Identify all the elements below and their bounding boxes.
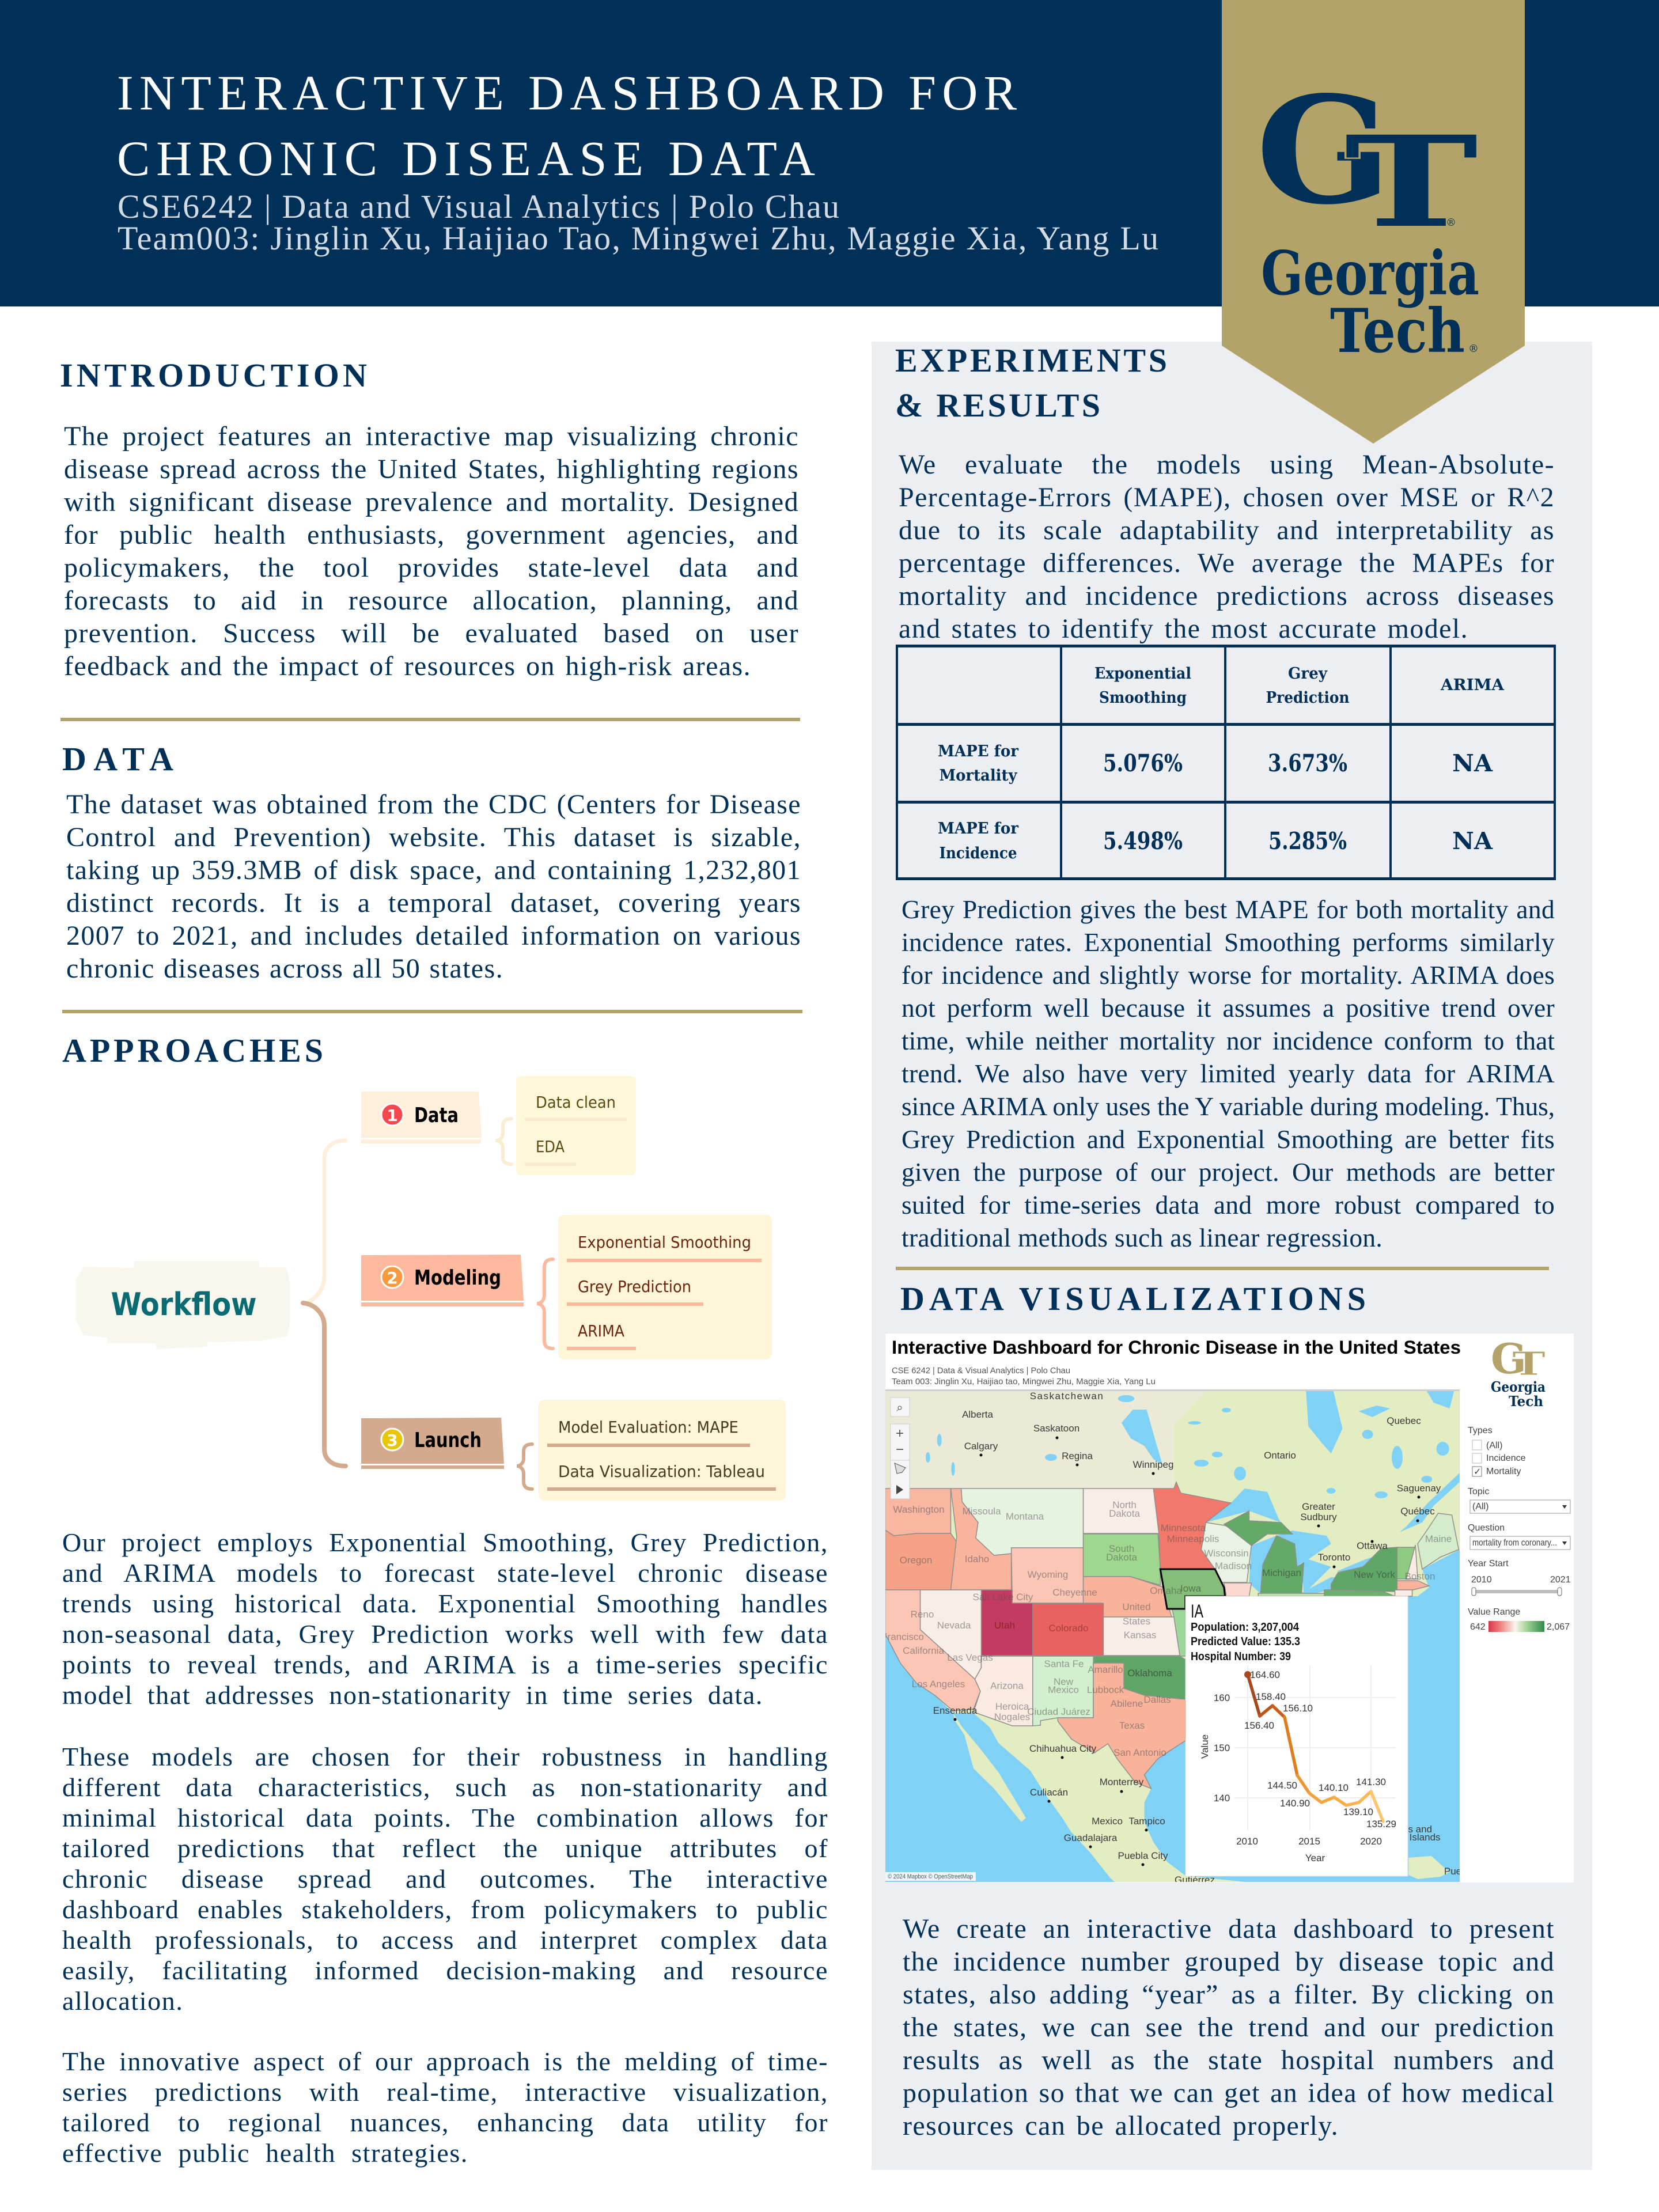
node: data: [361, 1092, 482, 1143]
map labels: Pue: [1444, 1866, 1461, 1877]
text: results discussion: incidence rates. Exponential Smoothing performs similarly: [902, 927, 1555, 957]
text: why these models: dashboard enables stakeholders, from policymakers to public: [62, 1895, 828, 1924]
lakes: [926, 1391, 1460, 1596]
course and team subtitle: [118, 188, 1158, 257]
map: Arizona: [990, 1680, 1024, 1691]
map: Idaho: [965, 1554, 989, 1565]
map labels: Toronto: [1318, 1552, 1350, 1563]
line chart: value by year: 2020: [1360, 1836, 1382, 1847]
tooltip text: Population: 3,207,004: [1191, 1621, 1300, 1634]
title: CHRONIC DISEASE DATA: [117, 131, 815, 186]
table header labels: Mortality: [939, 767, 1018, 785]
text: results discussion: time, while neither mortality nor incidence conform to that: [902, 1026, 1555, 1055]
sub-list: data steps: [516, 1076, 636, 1175]
map: Maine: [1425, 1533, 1452, 1544]
node: launch: Launch: [414, 1429, 482, 1452]
sidebar filters: 642: [1470, 1622, 1486, 1632]
map labels: Puebla City: [1118, 1850, 1168, 1861]
title: [117, 65, 1017, 186]
text: innovation: tailored to regional nuances, enhancing data utility for: [62, 2108, 828, 2137]
map: New: [1054, 1676, 1074, 1687]
sidebar filters: 2021: [1550, 1575, 1571, 1585]
map controls: −: [896, 1442, 904, 1457]
line chart: value by year: Year: [1305, 1853, 1325, 1863]
line chart: value by year: 141.30: [1356, 1777, 1386, 1787]
map: Utah: [994, 1620, 1015, 1631]
text: dashboard description: population so that we can get an idea of how medical: [903, 2078, 1555, 2108]
text: evaluation method: Percentage-Errors (MAPE), chosen over MSE or R^2: [899, 482, 1555, 513]
map: North: [1112, 1499, 1137, 1510]
table values: 5.498%: [1103, 827, 1183, 855]
workflow mind map: [75, 1076, 786, 1501]
text: results discussion: not perform well because it assumes a positive trend over: [902, 993, 1555, 1022]
text: why these models: tailored predictions that reflect the unique attributes of: [62, 1834, 828, 1863]
text: introduction: feedback and the impact of resources on high-risk areas.: [64, 651, 751, 681]
text: evaluation method: percentage differences. We average the MAPEs for: [899, 548, 1555, 578]
text: results discussion: since ARIMA only uses the Y variable during modeling. Thus,: [902, 1092, 1555, 1121]
small Georgia Tech logo: Georgia: [1491, 1378, 1546, 1395]
heading: experiments and results: EXPERIMENTS: [895, 342, 1167, 379]
table values: 5.285%: [1268, 827, 1347, 855]
heading: introduction: INTRODUCTION: [60, 357, 367, 394]
line chart: value by year: 160: [1214, 1692, 1230, 1703]
map: Oregon: [900, 1555, 932, 1566]
map labels: Culiacán: [1030, 1787, 1068, 1798]
heading: experiments and results: & RESULTS: [895, 387, 1100, 424]
logo: GT monogram: T: [1344, 109, 1478, 256]
text: why these models: minimal historical data points. The combination allows for: [62, 1803, 828, 1832]
logo: Georgia Tech wordmark: Georgia: [1261, 237, 1479, 309]
text: evaluation method: mortality and incidence predictions across diseases: [899, 581, 1555, 611]
land base: [885, 1389, 1460, 1882]
heading: approaches: APPROACHES: [62, 1032, 323, 1069]
map: Los Angeles: [912, 1679, 965, 1690]
text: results discussion: [902, 895, 1555, 1252]
sub-list: models: Exponential Smoothing: [578, 1233, 751, 1252]
map controls: +: [896, 1426, 904, 1441]
map: New York: [1354, 1569, 1395, 1580]
sub-list: data steps: EDA: [536, 1137, 565, 1156]
logo: GT monogram: G: [1256, 65, 1392, 237]
dashboard title: Team 003: Jinglin Xu, Haijiao tao, Mingwei Zhu, Maggie Xia, Yang Lu: [892, 1377, 1156, 1387]
line chart: value by year: 140.10: [1319, 1782, 1349, 1793]
logo: Georgia Tech wordmark: ®: [1468, 343, 1479, 355]
tooltip popup with trend chart: [1185, 1596, 1408, 1876]
line chart: value by year: 2010: [1236, 1836, 1258, 1847]
connector branches: [303, 1119, 553, 1489]
text: evaluation method: and states to identify the most accurate model.: [899, 613, 1468, 644]
text: introduction: disease spread across the United States, highlighting regions: [64, 454, 799, 484]
map: Ciudad Juárez: [1027, 1706, 1090, 1717]
map labels: Gutiérrez: [1175, 1874, 1215, 1885]
logo: Georgia Tech wordmark: [1261, 237, 1479, 366]
small Georgia Tech logo: G: [1491, 1334, 1527, 1383]
sub-list: launch steps: Data Visualization: Tableau: [558, 1462, 765, 1481]
sidebar filters: Types: [1468, 1426, 1493, 1435]
map: Nogales: [994, 1711, 1030, 1722]
text: approaches overview: Our project employs Exponential Smoothing, Grey Prediction,: [62, 1528, 828, 1557]
dashboard title: CSE 6242 | Data & Visual Analytics | Polo Chau: [892, 1366, 1070, 1376]
map labels: Monterrey: [1100, 1777, 1144, 1787]
text: approaches overview: points to reveal trends, and ARIMA is a time-series specific: [62, 1650, 828, 1679]
header banner: [0, 0, 1659, 306]
map: United: [1122, 1601, 1151, 1612]
line chart: value by year: 164.60: [1250, 1669, 1280, 1680]
tooltip text: Predicted Value: 135.3: [1191, 1635, 1300, 1648]
sub-list: models: ARIMA: [578, 1321, 624, 1340]
line chart: value by year: 139.10: [1343, 1806, 1373, 1817]
text: results discussion: Grey Prediction and Exponential Smoothing are better fits: [902, 1124, 1555, 1154]
text: why these models: easily, facilitating informed decision-making and resource: [62, 1956, 828, 1985]
text: evaluation method: [899, 449, 1555, 644]
text: introduction: for public health enthusiasts, government agencies, and: [64, 520, 799, 550]
table header labels: Incidence: [939, 844, 1017, 862]
text: dashboard description: [903, 1914, 1555, 2141]
panel: experiments, results and data visualizations: [872, 342, 1592, 2170]
line chart: value by year: 158.40: [1256, 1691, 1286, 1702]
node: data: 1: [387, 1106, 398, 1125]
logo: GT monogram: ®: [1446, 217, 1456, 229]
map: Mexico: [1048, 1684, 1079, 1695]
text: results discussion: trend. We also have very limited yearly data for ARIMA: [902, 1059, 1555, 1088]
map controls: [891, 1397, 910, 1499]
map labels: Regina: [1062, 1450, 1093, 1461]
text: results discussion: traditional methods such as linear regression.: [902, 1223, 1382, 1252]
text: approaches overview: [62, 1528, 828, 1710]
root node: workflow: [75, 1261, 290, 1349]
table values: [1103, 749, 1493, 855]
text: introduction: [64, 421, 799, 681]
map: Madison: [1215, 1560, 1252, 1571]
sidebar filters: 2010: [1471, 1575, 1492, 1585]
map: Omaha: [1150, 1585, 1182, 1596]
root node: workflow: Workflow: [111, 1286, 257, 1323]
table header labels: MAPE for: [938, 820, 1019, 838]
text: introduction: forecasts to aid in resource allocation, planning, and: [64, 585, 799, 616]
node: data: Data: [414, 1104, 459, 1127]
line chart: value by year: 140: [1214, 1793, 1230, 1804]
map: Texas: [1119, 1720, 1145, 1731]
sidebar filters: 2,067: [1547, 1622, 1570, 1632]
map labels: Guadalajara: [1064, 1832, 1118, 1843]
table header labels: Prediction: [1266, 689, 1350, 707]
text: approaches overview: non-seasonal data, Grey Prediction works well with few data: [62, 1619, 828, 1649]
heading: data visualizations: DATA VISUALIZATIONS: [900, 1280, 1366, 1317]
node: launch: [361, 1418, 504, 1469]
text: results discussion: Grey Prediction gives the best MAPE for both mortality and: [902, 895, 1555, 924]
small Georgia Tech logo: T: [1512, 1345, 1546, 1383]
line chart: value by year: 150: [1214, 1743, 1230, 1753]
text: results discussion: for incidence and slightly worse for mortality. ARIMA does: [902, 960, 1555, 990]
map: Cheyenne: [1052, 1587, 1097, 1598]
text: dashboard description: results as well as the state hospital numbers and: [903, 2045, 1555, 2075]
sidebar filters: (All): [1472, 1502, 1488, 1512]
text: why these models: [62, 1742, 828, 2016]
text: innovation: [62, 2047, 828, 2168]
map labels: Quebec: [1387, 1415, 1421, 1426]
text: data: The dataset was obtained from the CDC (Centers for Disease: [66, 789, 801, 820]
line chart: value by year: [1199, 1665, 1396, 1863]
map labels: Saskatchewan: [1030, 1391, 1104, 1402]
text: innovation: effective public health strategies.: [62, 2138, 468, 2168]
map labels: Sudbury: [1300, 1512, 1337, 1522]
table values: 5.076%: [1103, 749, 1183, 777]
sidebar filters: ✓: [1474, 1467, 1481, 1477]
map labels: Alberta: [962, 1409, 993, 1420]
map: Montana: [1006, 1511, 1044, 1522]
map labels: Ontario: [1264, 1450, 1296, 1461]
course and team subtitle: Team003: Jinglin Xu, Haijiao Tao, Mingwei Zhu, Maggie Xia, Yang Lu: [118, 219, 1158, 257]
text: dashboard description: states, also adding “year” as a filter. By clicking on: [903, 1979, 1555, 2010]
map: Dallas: [1143, 1694, 1171, 1705]
sub-list: launch steps: Model Evaluation: MAPE: [558, 1418, 738, 1437]
map: Michigan: [1262, 1567, 1301, 1578]
map labels: Ensenada: [933, 1705, 978, 1716]
sub-list: launch steps: [539, 1400, 786, 1501]
Georgia Tech ribbon with logo: [1222, 0, 1525, 444]
heading: experiments and results: [895, 342, 1167, 424]
map: San Antonio: [1113, 1747, 1166, 1758]
tooltip text: IA: [1191, 1601, 1203, 1622]
map: Lubbock: [1087, 1684, 1124, 1695]
dashboard title: [892, 1337, 1461, 1387]
table header labels: Exponential: [1094, 665, 1191, 683]
dashboard screenshot: [885, 1334, 1574, 1883]
small Georgia Tech logo: [1491, 1334, 1546, 1410]
map: Dakota: [1109, 1508, 1140, 1519]
map labels: Ottawa: [1357, 1540, 1388, 1551]
text: evaluation method: due to its scale adaptability and interpretability as: [899, 515, 1555, 546]
title: INTERACTIVE DASHBOARD FOR: [117, 65, 1017, 120]
map: California: [903, 1645, 944, 1656]
line chart: value by year: 156.10: [1283, 1703, 1313, 1714]
map: Boston: [1405, 1571, 1435, 1582]
map: Nevada: [937, 1620, 971, 1631]
map labels: Winnipeg: [1133, 1459, 1173, 1470]
map controls: ⌕: [896, 1402, 903, 1414]
map: Wisconsin: [1204, 1548, 1249, 1559]
sidebar filters: mortality from coronary...: [1472, 1538, 1557, 1548]
table header labels: [938, 665, 1505, 862]
text: results discussion: given the purpose of our project. Our methods are better: [902, 1157, 1555, 1187]
logo: GT monogram: [1256, 65, 1478, 256]
logo: Georgia Tech wordmark: Tech: [1330, 295, 1465, 366]
map: Abilene: [1111, 1698, 1143, 1709]
map: Santa Fe: [1044, 1658, 1084, 1669]
node: modeling: [361, 1255, 524, 1306]
sub-list: models: Grey Prediction: [578, 1277, 691, 1296]
map labels: Calgary: [964, 1441, 998, 1452]
line chart: value by year: 2015: [1298, 1836, 1320, 1847]
text: dashboard description: the states, we can see the trend and our prediction: [903, 2012, 1555, 2043]
sidebar filters: Year Start: [1468, 1559, 1509, 1569]
map: Minneapolis: [1167, 1533, 1219, 1544]
map labels: ks and: [1403, 1824, 1432, 1835]
map labels: [933, 1391, 1461, 1885]
text: why these models: health professionals, to access and interpret complex data: [62, 1925, 828, 1955]
map: South: [1109, 1543, 1134, 1554]
text: approaches overview: model that addresses non-stationarity in time series data.: [62, 1680, 763, 1710]
table header labels: Grey: [1288, 665, 1328, 683]
map: Amarillo: [1088, 1664, 1123, 1675]
table header labels: Smoothing: [1099, 689, 1187, 707]
map labels: Chihuahua City: [1029, 1743, 1097, 1754]
sidebar filters: [1468, 1426, 1571, 1632]
text: data: 2007 to 2021, and includes detailed information on various: [66, 921, 801, 951]
map: Minnesota: [1161, 1522, 1206, 1533]
map: Dakota: [1106, 1552, 1137, 1563]
text: why these models: chronic disease spread and outcomes. The interactive: [62, 1864, 828, 1893]
map: Colorado: [1048, 1623, 1089, 1634]
map: [881, 1389, 1461, 1885]
map labels: Tampico: [1128, 1816, 1165, 1827]
map labels: s Islands: [1402, 1832, 1441, 1843]
choropleth states: [885, 1482, 1459, 1789]
text: data: [66, 789, 801, 984]
small Georgia Tech logo: Tech: [1509, 1393, 1543, 1410]
map: Oklahoma: [1127, 1668, 1172, 1679]
map labels: Québec: [1400, 1506, 1435, 1517]
text: innovation: series predictions with real-time, interactive visualization,: [62, 2077, 828, 2107]
text: dashboard description: We create an interactive data dashboard to present: [903, 1914, 1555, 1944]
sidebar filters: Mortality: [1486, 1467, 1521, 1476]
map: Iowa: [1180, 1583, 1201, 1594]
text: approaches overview: and ARIMA models to forecast state-level chronic disease: [62, 1558, 828, 1588]
table header labels: MAPE for: [938, 743, 1019, 760]
sidebar filters: Topic: [1468, 1487, 1489, 1497]
sub-list: data steps: Data clean: [536, 1093, 616, 1112]
text: dashboard description: the incidence number grouped by disease topic and: [903, 1946, 1555, 1977]
line chart: value by year: 144.50: [1267, 1780, 1297, 1791]
text: data: distinct records. It is a temporal dataset, covering years: [66, 888, 801, 918]
text: introduction: prevention. Success will be evaluated based on user: [64, 618, 799, 649]
line chart: value by year: 135.29: [1366, 1819, 1396, 1830]
city dots: [954, 1437, 1421, 1866]
map: Washington: [893, 1504, 945, 1515]
tooltip text: Hospital Number: 39: [1191, 1650, 1291, 1663]
sidebar filters: (All): [1486, 1441, 1502, 1450]
table: MAPE results: [896, 645, 1556, 880]
node: modeling: 2: [387, 1268, 398, 1287]
line chart: value by year: 156.40: [1244, 1720, 1274, 1731]
map: Reno: [911, 1609, 934, 1620]
text: data: chronic diseases across all 50 states.: [66, 953, 503, 984]
node: modeling: Modeling: [414, 1266, 501, 1290]
text: introduction: policymakers, the tool provides state-level data and: [64, 552, 799, 583]
map: States: [1123, 1616, 1150, 1627]
sidebar filters: Question: [1468, 1523, 1505, 1533]
map labels: Greater: [1302, 1501, 1335, 1512]
sub-list: models: [558, 1215, 772, 1359]
map labels: Saguenay: [1397, 1483, 1441, 1494]
heading: data: DATA: [62, 740, 173, 778]
sidebar filters: Incidence: [1486, 1453, 1526, 1463]
text: introduction: The project features an interactive map visualizing chronic: [64, 421, 799, 452]
node: launch: 3: [387, 1431, 398, 1450]
text: why these models: different data characteristics, such as non-stationarity and: [62, 1772, 828, 1802]
table values: NA: [1452, 749, 1493, 777]
map attribution: © 2024 Mapbox © OpenStreetMap: [888, 1873, 973, 1880]
sidebar filters: Value Range: [1468, 1607, 1520, 1617]
text: evaluation method: We evaluate the models using Mean-Absolute-: [899, 449, 1555, 480]
tooltip text: [1191, 1601, 1300, 1663]
text: why these models: These models are chosen for their robustness in handling: [62, 1742, 828, 1771]
text: dashboard description: resources can be allocated properly.: [903, 2111, 1339, 2141]
map: Salt Lake City: [973, 1592, 1033, 1603]
map: Wyoming: [1028, 1569, 1068, 1580]
table values: 3.673%: [1268, 749, 1347, 777]
text: data: Control and Prevention) website. This dataset is sizable,: [66, 822, 801, 853]
dashboard title: Interactive Dashboard for Chronic Disease in the United States: [892, 1337, 1461, 1358]
map: Francisco: [881, 1631, 924, 1642]
map: Kansas: [1124, 1630, 1156, 1641]
text: data: taking up 359.3MB of disk space, and containing 1,232,801: [66, 855, 801, 885]
map labels: Saskatoon: [1033, 1423, 1080, 1434]
text: results discussion: suited for time-series data and more robust compared to: [902, 1190, 1555, 1219]
text: approaches overview: trends using historical data. Exponential Smoothing handles: [62, 1589, 828, 1618]
text: introduction: with significant disease prevalence and mortality. Designed: [64, 487, 799, 517]
line chart: value by year: Value: [1199, 1734, 1210, 1759]
map labels: Mexico: [1092, 1816, 1123, 1827]
course and team subtitle: CSE6242 | Data and Visual Analytics | Polo Chau: [118, 188, 839, 225]
table header labels: ARIMA: [1440, 676, 1505, 694]
text: innovation: The innovative aspect of our approach is the melding of time-: [62, 2047, 828, 2076]
map: Heroica: [995, 1701, 1029, 1712]
text: why these models: allocation.: [62, 1986, 183, 2016]
table values: NA: [1452, 827, 1493, 855]
map: Las Vegas: [947, 1652, 993, 1663]
map: Missoula: [962, 1506, 1001, 1517]
line chart: value by year: 140.90: [1280, 1798, 1310, 1809]
